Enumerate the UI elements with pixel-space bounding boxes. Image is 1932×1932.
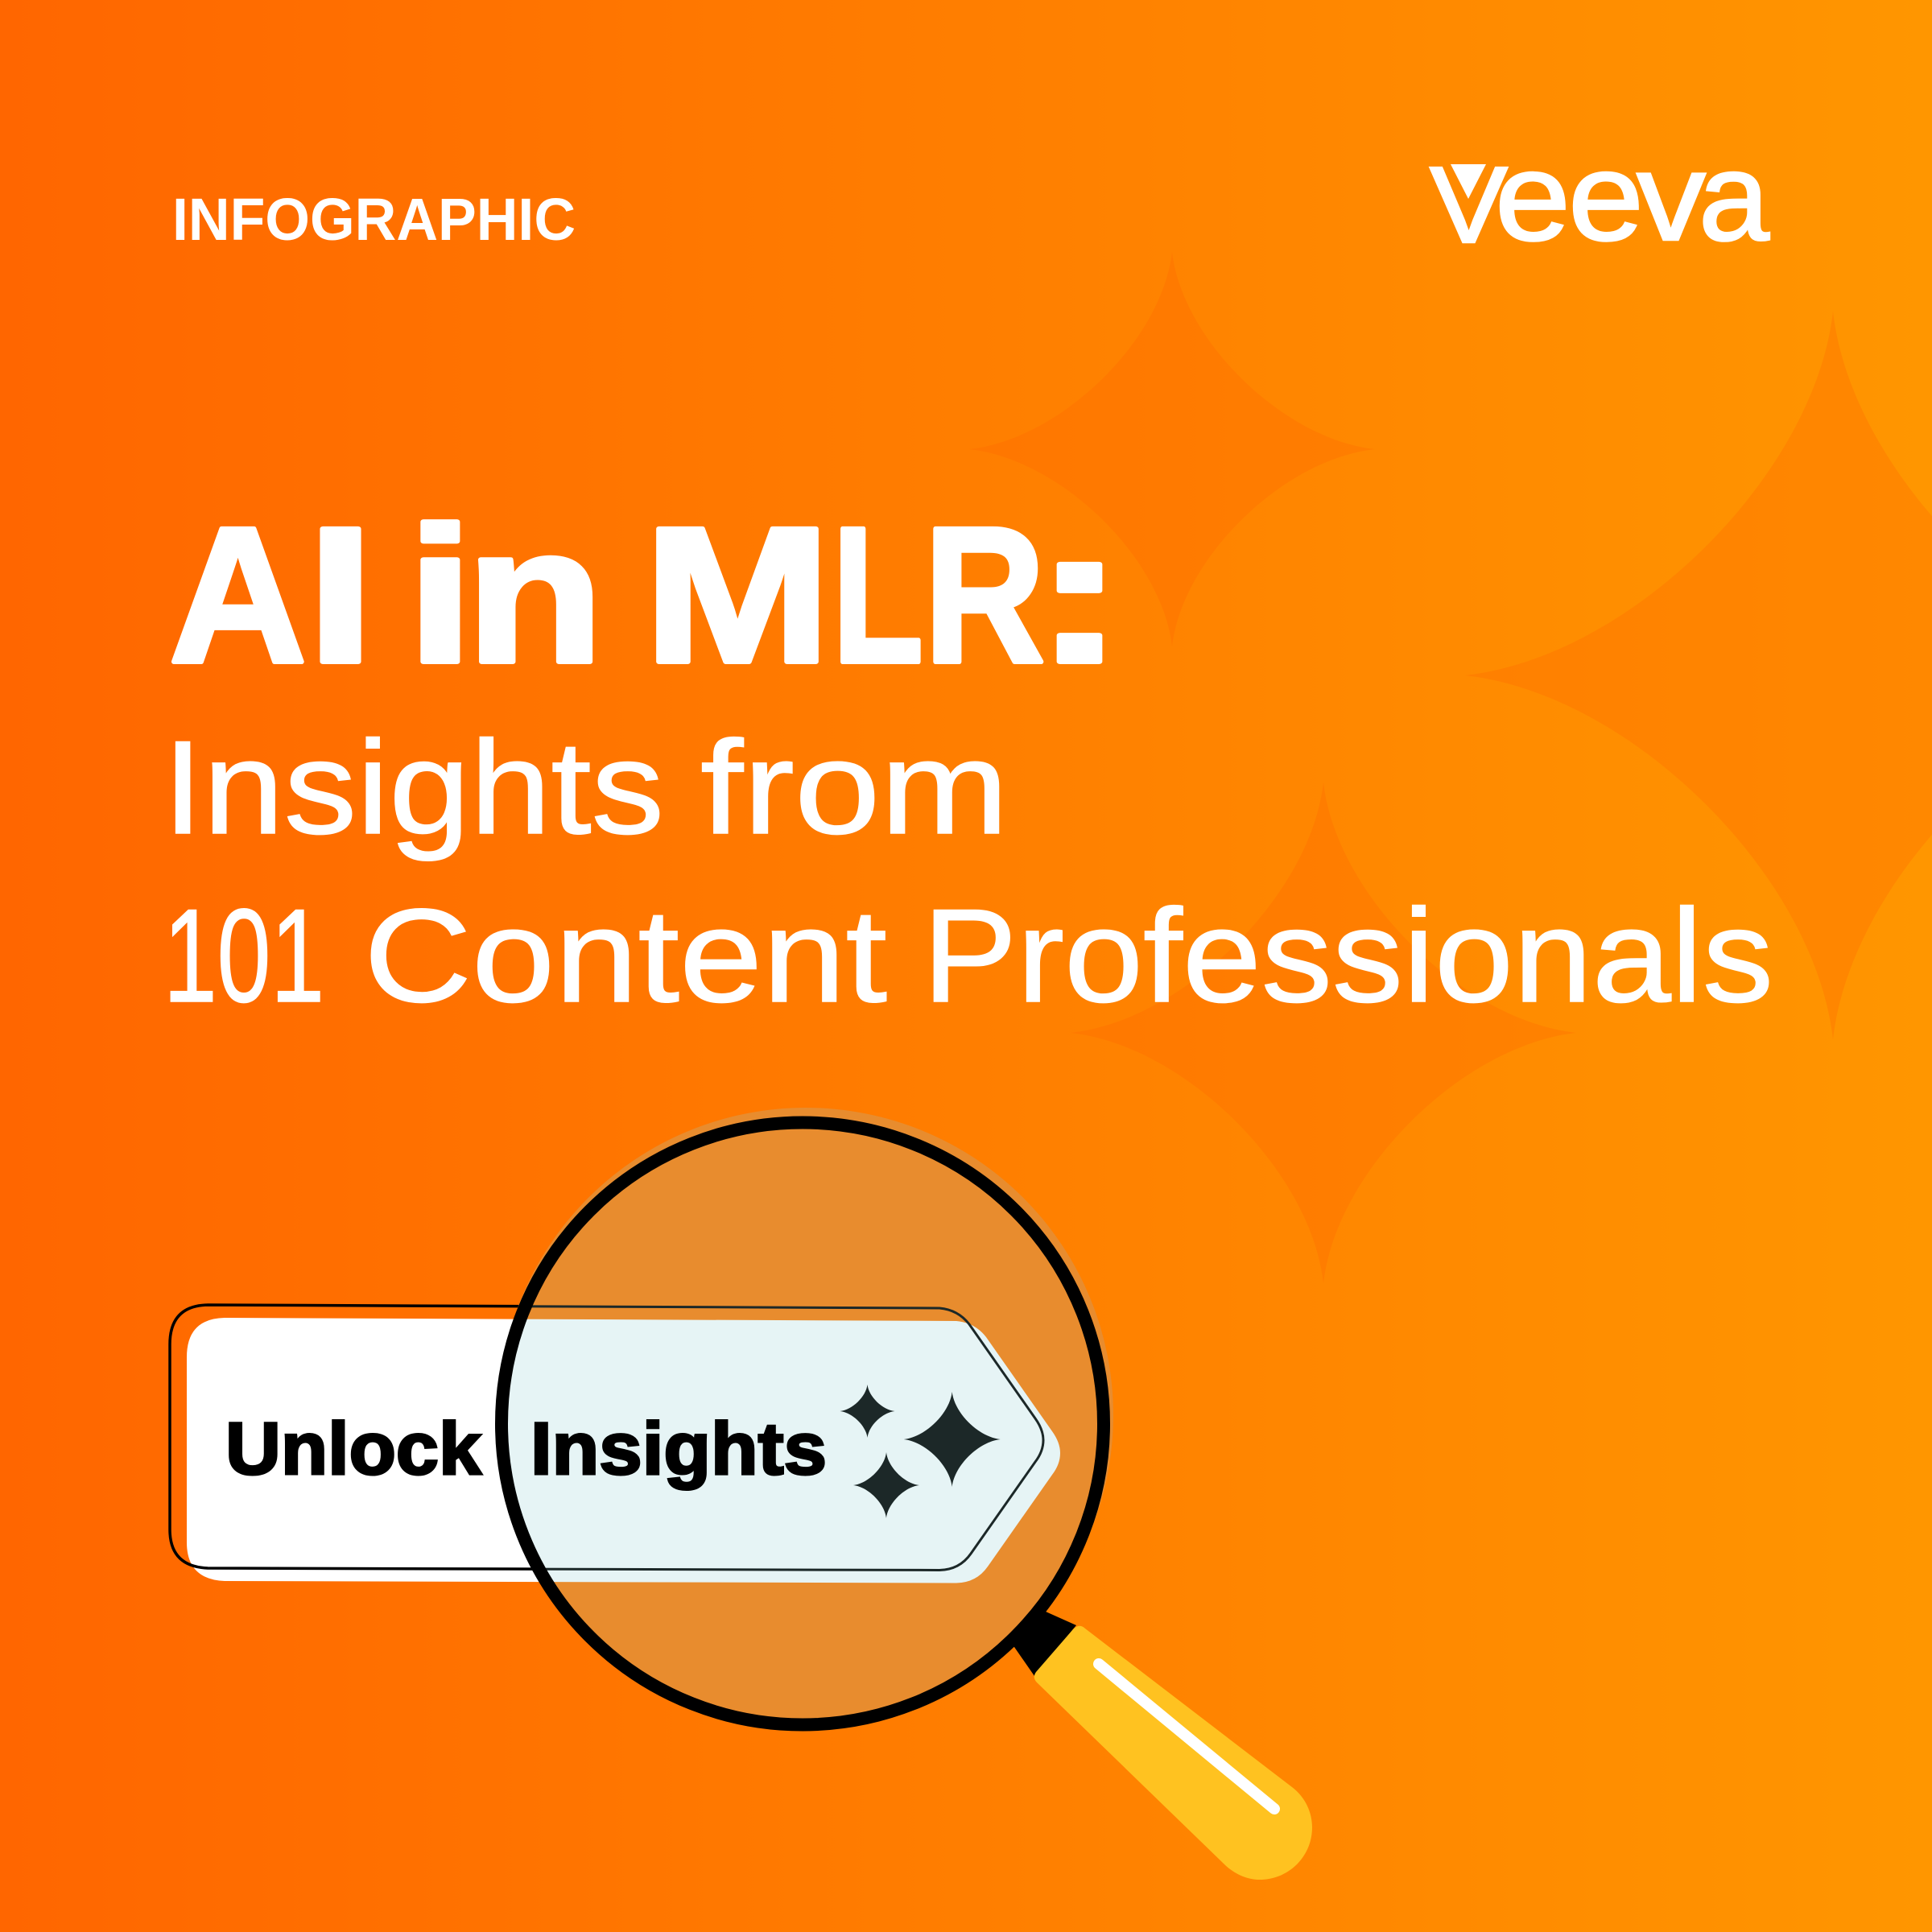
magnified tag body bbox=[508, 1319, 1060, 1583]
subtitle line 2: 101 bbox=[163, 881, 324, 1030]
magnifier lens glass bbox=[498, 1108, 1113, 1723]
subtitle line 1: from bbox=[700, 713, 1009, 861]
title: AI in MLR: L bbox=[832, 487, 923, 703]
logo triangle mark bbox=[1451, 164, 1486, 199]
subtitle line 2: Professionals bbox=[923, 881, 1773, 1030]
title: AI in MLR: i bbox=[407, 487, 474, 703]
logo: Veeva bbox=[1430, 127, 1769, 267]
button text: Insights: Insights bbox=[530, 1408, 827, 1490]
title: AI in MLR: n bbox=[466, 487, 604, 703]
magnifier ring bbox=[502, 1122, 1104, 1724]
title: AI in MLR: A bbox=[169, 487, 307, 703]
magnified tag outline bbox=[531, 1305, 1045, 1571]
logo wordmark: V bbox=[1430, 144, 1508, 266]
button text: Unlock: Unlock bbox=[225, 1408, 482, 1490]
button: white tag bbox=[187, 1318, 1060, 1583]
magnifier handle bbox=[1034, 1626, 1312, 1880]
button outline bbox=[170, 1305, 1043, 1570]
decorative background stars bbox=[969, 252, 1932, 1283]
logo wordmark: a bbox=[1699, 127, 1769, 267]
title: AI in MLR: I bbox=[307, 487, 374, 703]
logo wordmark: e bbox=[1495, 127, 1571, 267]
subtitle line 1: Insights bbox=[163, 713, 664, 861]
label: INFOGRAPHIC: INFOGRAPHIC bbox=[172, 186, 576, 253]
title: AI in MLR: R bbox=[924, 487, 1045, 703]
magnified area of button bbox=[508, 1305, 1060, 1583]
magnifier handle connector bbox=[998, 1602, 1076, 1676]
title: AI in MLR: : bbox=[1034, 487, 1125, 703]
handle highlight bbox=[1099, 1664, 1274, 1809]
icon: sparkle stars bbox=[840, 1385, 1001, 1518]
title: AI in MLR: M bbox=[644, 487, 831, 703]
logo wordmark: e bbox=[1568, 127, 1644, 267]
logo wordmark: v bbox=[1637, 127, 1706, 267]
subtitle line 2: Content bbox=[364, 881, 887, 1030]
